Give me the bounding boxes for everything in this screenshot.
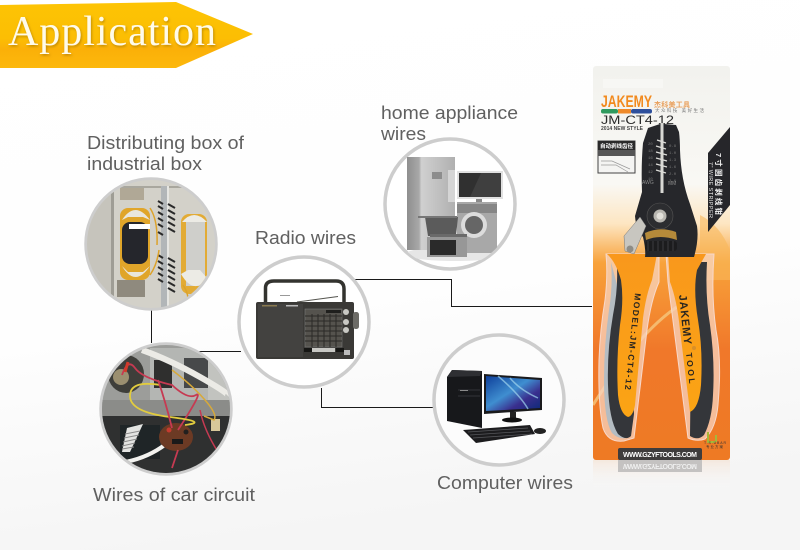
stripper head: 10 <box>648 178 653 182</box>
label: home appliance wires: wires <box>380 123 426 144</box>
stripper head <box>624 123 698 257</box>
banner: Application <box>0 2 253 68</box>
stripper head: 1.3 <box>669 159 677 163</box>
circle photo: distribution box <box>85 178 223 310</box>
stripper head: 18 <box>648 150 653 154</box>
brand logo: JAKEMY <box>601 92 652 111</box>
stripper head: MM <box>668 181 676 187</box>
stripper head: 14 <box>648 164 653 168</box>
corner logo <box>704 432 726 449</box>
stripper head: 16 <box>648 157 653 161</box>
connector lines <box>152 280 592 408</box>
card decorative swoosh <box>593 215 730 406</box>
stripper head: AWG <box>642 180 654 186</box>
stripper head: 20 <box>648 143 653 147</box>
circle photo: home appliances <box>385 139 515 269</box>
label: distributing box: Distributing box of <box>87 132 245 153</box>
stripper head: 12 <box>648 171 653 175</box>
slogan: 大众科技 美好生活 <box>655 107 704 114</box>
spec box <box>598 141 635 173</box>
label: home appliance wires: home appliance <box>381 102 518 123</box>
stripper left handle: MODEL:JM-CT4-12 <box>623 293 643 391</box>
colour strip <box>601 109 652 114</box>
stripper right handle: JAKEMY <box>676 294 693 346</box>
label: car circuit: Wires of car circuit <box>93 484 255 505</box>
circle photo: radio <box>239 257 369 387</box>
card reflection <box>593 460 730 488</box>
brand Chinese name: 杰科美工具 <box>654 100 690 109</box>
stripper right handle <box>666 254 720 440</box>
website bar <box>618 448 702 460</box>
spec box: 自动剥线齿径 <box>600 142 633 150</box>
model number: JM-CT4-12 <box>601 113 674 127</box>
stripper head: 1.6 <box>669 166 677 170</box>
card <box>593 66 730 460</box>
black side banner: 7" WIRE STRIPPER <box>707 162 713 218</box>
stripper head: 2.0 <box>669 173 677 177</box>
label: distributing box: industrial box <box>87 153 203 174</box>
product: blister card with wire stripper <box>593 66 730 488</box>
circle photo: car circuit <box>100 343 235 476</box>
style line: 2014 NEW STYLE <box>601 126 644 132</box>
corner logo: T.S.UBAR <box>704 441 726 445</box>
black side banner: 7寸圆齿剥线钳 <box>714 153 724 216</box>
black side banner <box>707 127 730 232</box>
stripper head: 0.8 <box>669 145 677 149</box>
label: radio wires: Radio wires <box>255 227 356 248</box>
website bar: WWW.GZYFTOOLS.COM <box>623 452 697 459</box>
label: computer wires: Computer wires <box>437 472 573 493</box>
heading: Application <box>8 9 216 55</box>
stripper right handle: TOOL <box>684 352 697 384</box>
circle photo: computer <box>434 335 564 465</box>
stripper left handle <box>599 254 659 441</box>
stripper head: 2.6 <box>669 180 677 184</box>
stripper head: 1.0 <box>669 152 677 156</box>
corner logo: 专业方案 <box>706 444 724 449</box>
card reflection: WWW.GZYFTOOLS.COM <box>623 462 697 469</box>
